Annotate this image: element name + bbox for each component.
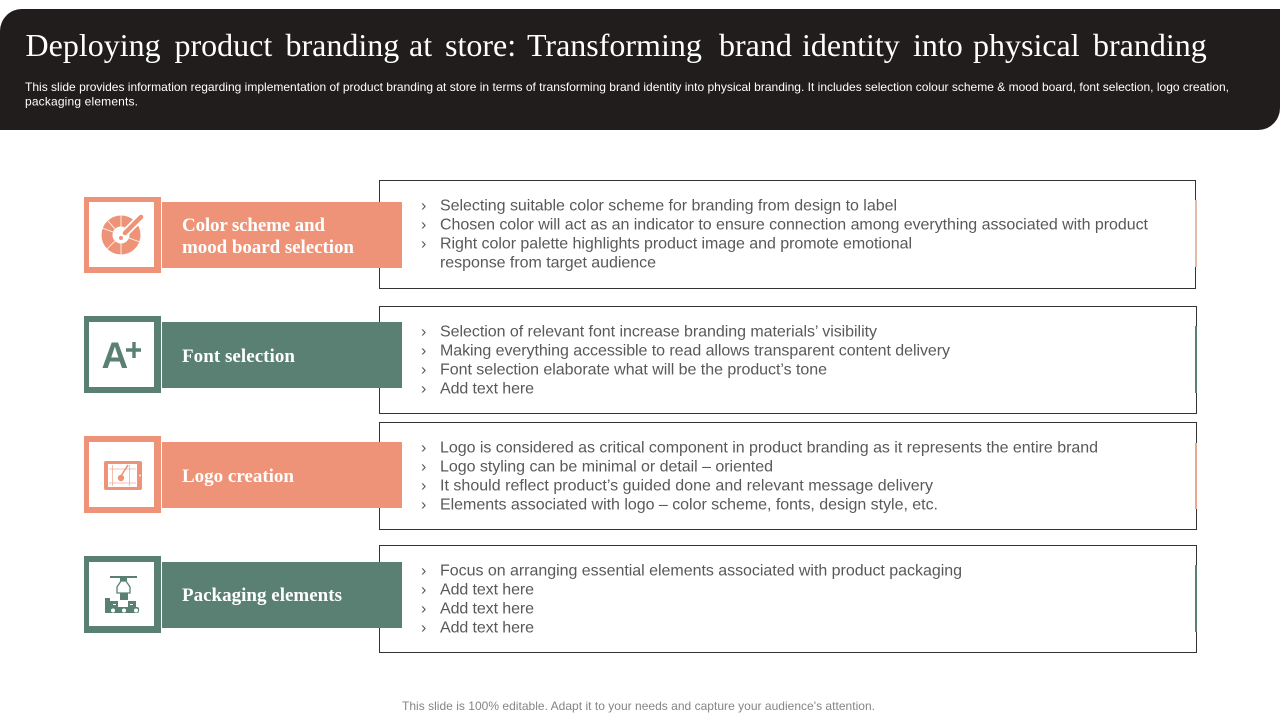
subtitle: packaging elements. <box>25 94 138 108</box>
content box 3: › <box>421 478 426 494</box>
content box 4: Focus on arranging essential elements associated with product packaging <box>440 562 962 580</box>
content box 4 <box>380 546 1197 652</box>
title: into <box>913 27 963 63</box>
content box 3 <box>380 422 1197 530</box>
content box 1: › <box>421 216 426 234</box>
content box 1: Chosen color will act as an indicator to ensure connection among everything associated with product <box>440 216 1149 234</box>
title: identity <box>802 27 900 63</box>
content box 4: Add text here <box>440 582 534 598</box>
subtitle <box>25 80 1229 108</box>
content box 2: Add text here <box>440 380 534 398</box>
content box 3: › <box>421 458 426 476</box>
content box 1: Right color palette highlights product image and promote emotional <box>440 236 912 252</box>
panel: packaging elements <box>84 546 1197 652</box>
content box 4: Add text here <box>440 600 534 618</box>
label bar 1: Color scheme and <box>182 215 325 236</box>
content box 1: Selecting suitable color scheme for branding from design to label <box>440 198 897 214</box>
label bar 2 <box>162 322 402 388</box>
content box 2: › <box>421 342 426 360</box>
label bar 2: Font selection <box>182 346 295 367</box>
label bar 1: mood board selection <box>182 237 354 258</box>
content box 4: › <box>421 582 426 598</box>
title: store: <box>445 27 516 63</box>
label bar 4 <box>162 562 402 628</box>
content box 1 <box>380 180 1197 288</box>
content box 3: › <box>421 440 426 456</box>
header banner <box>0 9 1280 130</box>
content box 3: Elements associated with logo – color scheme, fonts, design style, etc. <box>440 496 938 514</box>
footer note: This slide is 100% editable. Adapt it to your needs and capture your audience's attention. <box>402 699 875 713</box>
content box 2: Making everything accessible to read allows transparent content delivery <box>440 342 950 360</box>
content box 3: Logo is considered as critical component in product branding as it represents the entire brand <box>440 440 1098 456</box>
title: physical <box>973 27 1080 63</box>
panel: font selection <box>84 306 1197 414</box>
title: brand <box>719 27 792 63</box>
content box 1: › <box>421 236 426 252</box>
content box 2: › <box>421 380 426 398</box>
icon: packaging conveyor <box>84 556 161 633</box>
title: at <box>409 27 432 63</box>
content box 1: response from target audience <box>440 254 656 272</box>
content box 2: › <box>421 362 426 378</box>
title: Deploying <box>26 27 161 63</box>
icon: tablet with logo grid <box>84 436 161 513</box>
label bar 1 <box>162 202 402 268</box>
title: branding <box>1093 27 1207 63</box>
content box 3: › <box>421 496 426 514</box>
subtitle: This slide provides information regarding implementation of product branding at store in terms of transforming brand identity into physical branding. It includes selection colour scheme & mood board, font selection, logo creation, <box>25 80 1229 94</box>
content box 4: › <box>421 600 426 618</box>
icon: A plus <box>84 316 161 393</box>
content box 2 <box>380 306 1197 414</box>
title: product <box>174 27 272 63</box>
label bar 3: Logo creation <box>182 466 294 487</box>
icon: colour wheel and brush <box>84 197 161 273</box>
content box 2: › <box>421 324 426 340</box>
content box 4: › <box>421 620 426 636</box>
title: branding <box>286 27 399 63</box>
icon: A plus: A <box>102 335 128 376</box>
content box 1: › <box>421 198 426 214</box>
content box 2: Selection of relevant font increase branding materials’ visibility <box>440 324 877 340</box>
content box 4: › <box>421 562 426 580</box>
content box 4: Add text here <box>440 620 534 636</box>
content box 2: Font selection elaborate what will be the product’s tone <box>440 362 827 378</box>
content box 3: It should reflect product’s guided done and relevant message delivery <box>440 478 933 494</box>
panel: color scheme <box>84 180 1197 288</box>
panel: logo creation <box>84 422 1197 530</box>
content box 3: Logo styling can be minimal or detail – oriented <box>440 458 773 476</box>
title: Transforming <box>527 27 702 63</box>
label bar 4: Packaging elements <box>182 585 342 606</box>
label bar 3 <box>162 442 402 508</box>
